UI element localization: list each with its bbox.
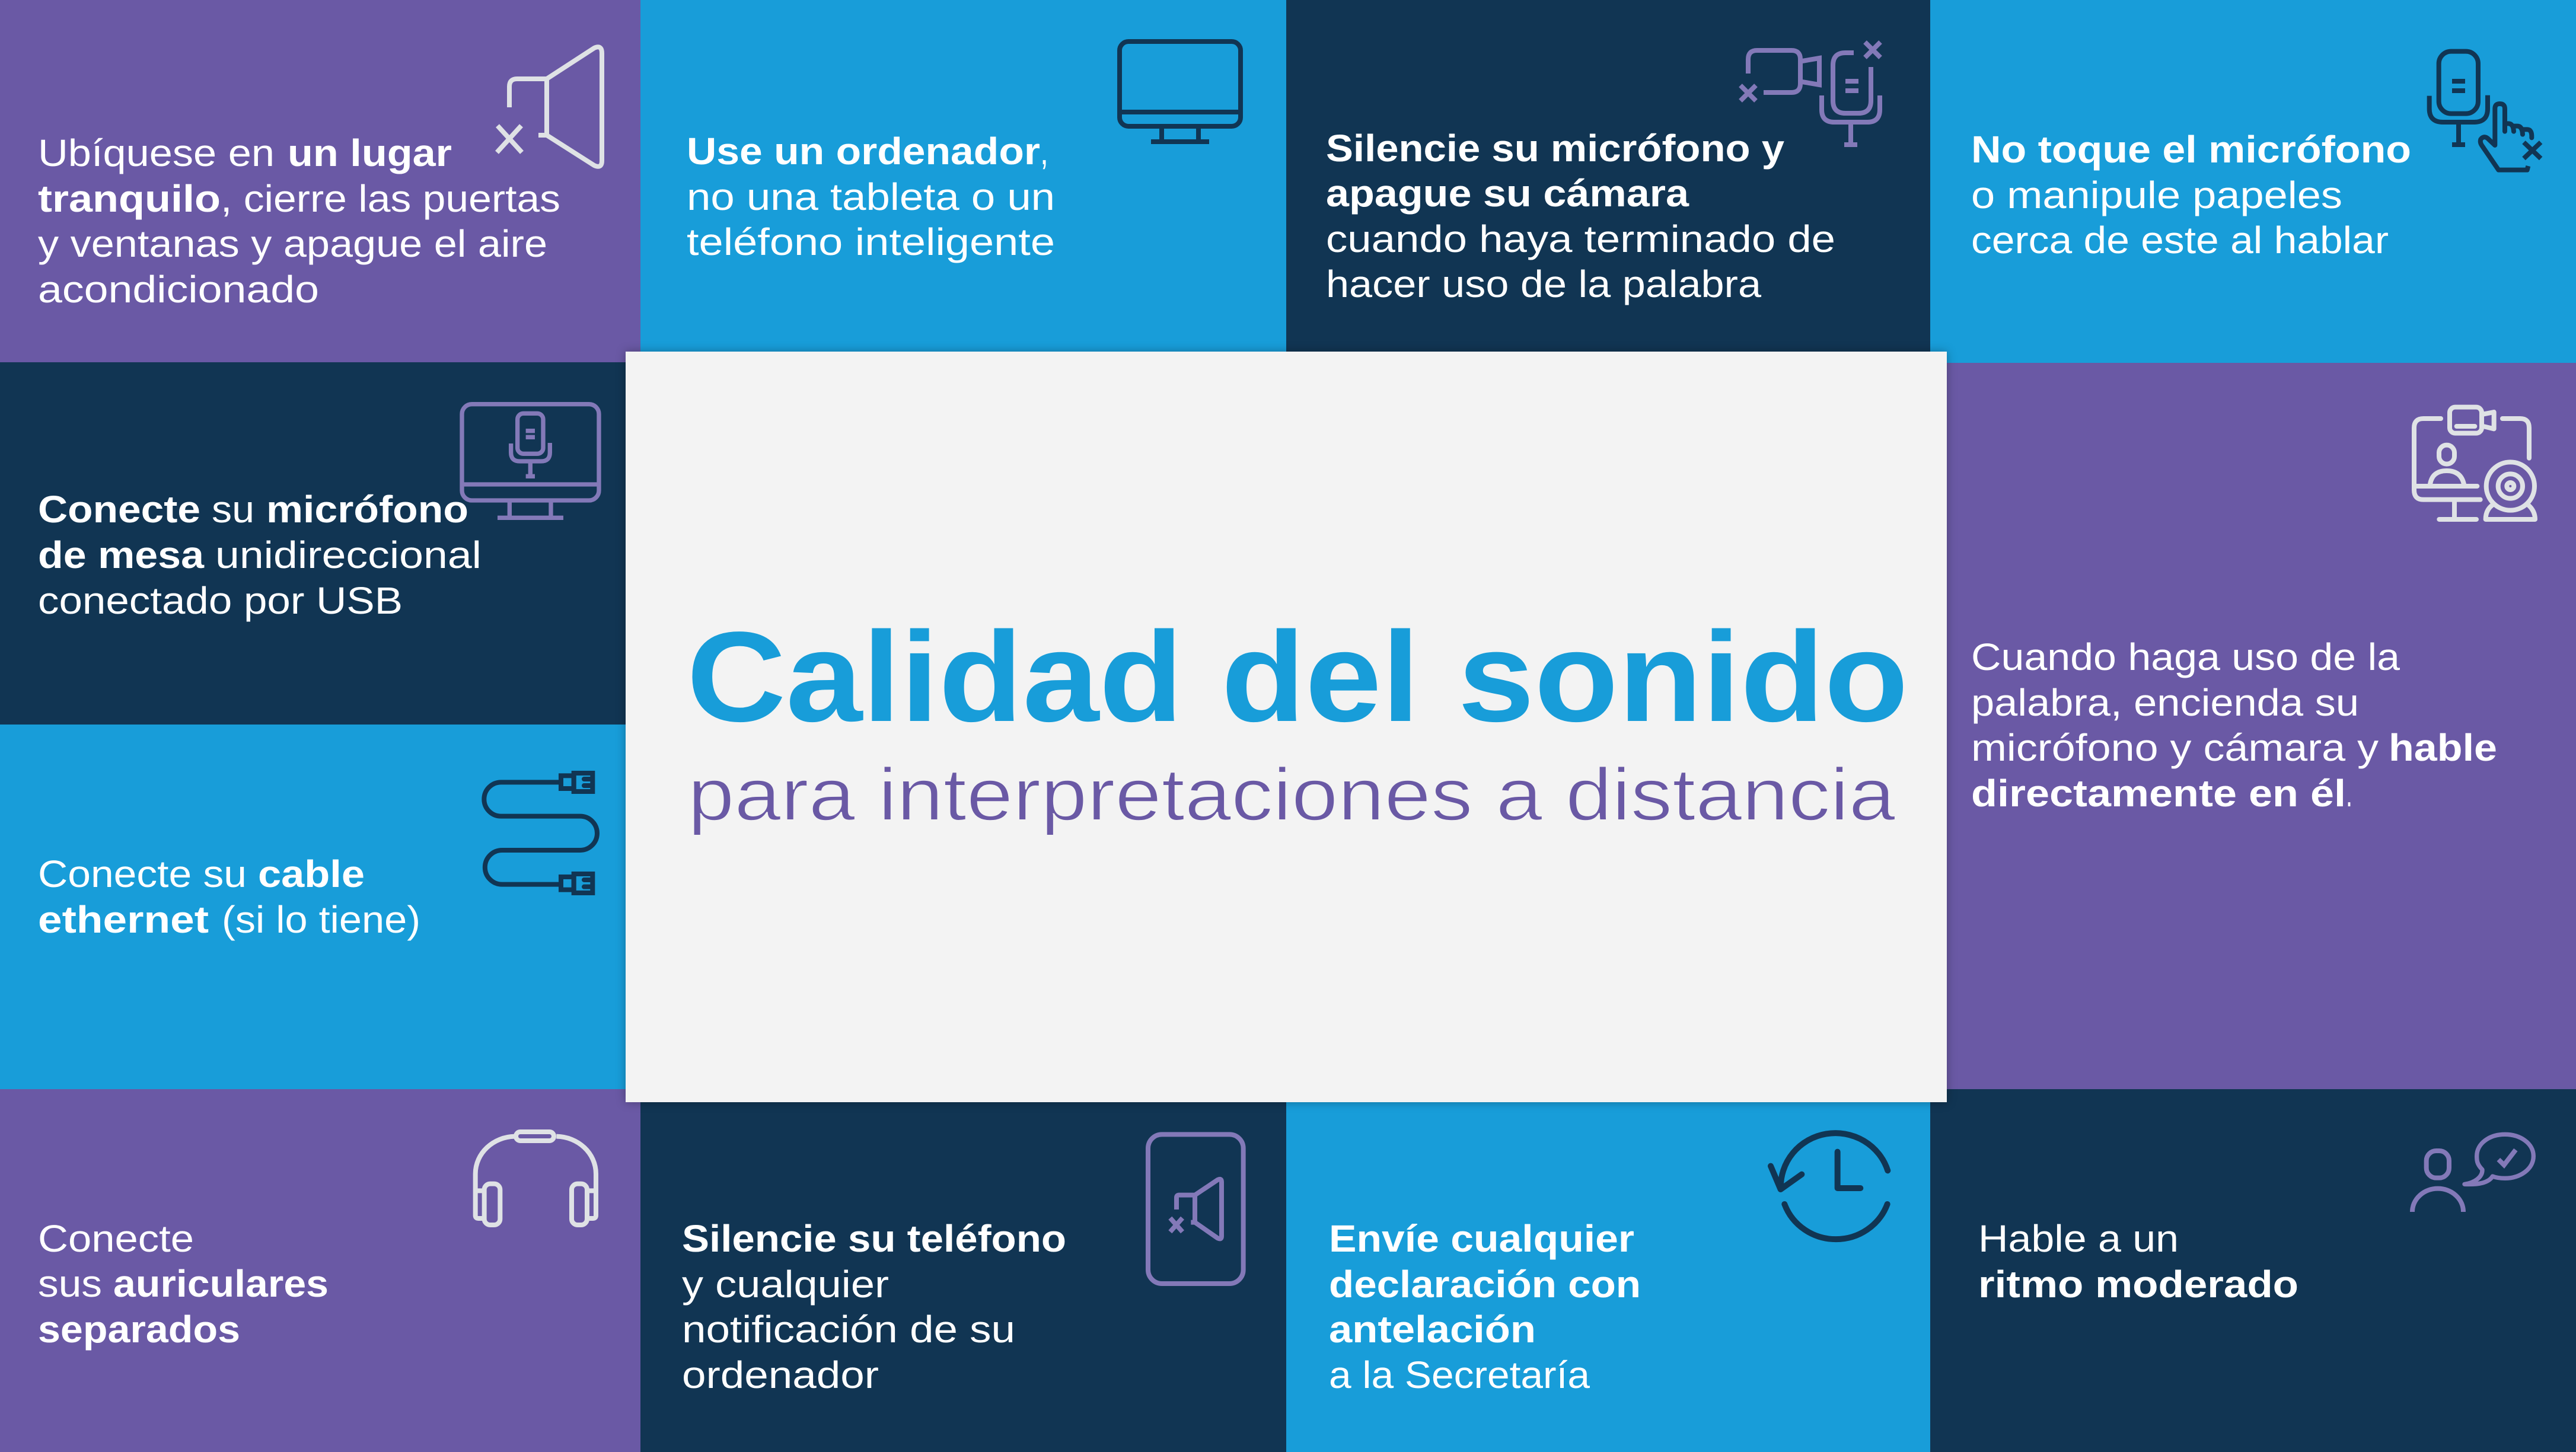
text: moderate pace: ritmo moderado	[1978, 1263, 2298, 1306]
text: speak directly: Cuando haga uso de la	[1971, 636, 2400, 678]
text: moderate pace	[1978, 1217, 2298, 1306]
text: use a computer: ,	[1040, 130, 1048, 173]
panel: mute when finished	[1286, 0, 1930, 362]
panel: do not touch microphone	[1930, 0, 2576, 363]
text: mute when finished: Silencie su micrófono y	[1326, 127, 1784, 170]
panel: moderate pace	[1930, 1089, 2576, 1452]
text: speak directly: .	[2346, 772, 2352, 815]
text: speak directly	[1971, 636, 2497, 815]
text: separate headphones: auriculares	[113, 1262, 329, 1305]
panel: separate headphones	[0, 1089, 640, 1452]
text: separate headphones	[38, 1217, 329, 1351]
text: mute when finished: cuando haya terminado de	[1326, 218, 1835, 260]
text: ethernet cable: cable	[258, 853, 365, 895]
text: desk microphone: unidireccional	[215, 534, 482, 576]
text: separate headphones: Conecte	[38, 1217, 194, 1260]
text: quiet place: tranquilo	[38, 177, 221, 220]
panel: use a computer	[640, 0, 1286, 362]
text: use a computer: teléfono inteligente	[687, 221, 1055, 263]
text: quiet place: un lugar	[288, 132, 452, 174]
text: speak directly: micrófono y cámara y	[1971, 726, 2379, 769]
text: use a computer	[687, 130, 1055, 263]
title: Calidad del sonido	[687, 605, 1908, 748]
text: do not touch microphone: No toque el micrófono	[1971, 128, 2411, 171]
text: send statement	[1329, 1217, 1641, 1396]
text: ethernet cable	[38, 853, 420, 941]
panel: ethernet cable	[0, 725, 640, 1089]
panel: send statement	[1286, 1089, 1930, 1452]
text: quiet place: acondicionado	[38, 268, 319, 311]
text: send statement: declaración con	[1329, 1263, 1641, 1306]
text: do not touch microphone	[1971, 128, 2411, 261]
text: send statement: antelación	[1329, 1308, 1536, 1351]
text: desk microphone: Conecte	[38, 488, 200, 531]
text: do not touch microphone: cerca de este al hablar	[1971, 219, 2389, 261]
text: silence phone: ordenador	[682, 1354, 879, 1396]
text: quiet place	[38, 132, 560, 311]
text: ethernet cable: (si lo tiene)	[222, 898, 420, 941]
panel: quiet place	[0, 0, 640, 362]
icon: cable	[484, 773, 597, 893]
text: silence phone: y cualquier	[682, 1263, 889, 1306]
text: ethernet cable: Conecte su	[38, 853, 247, 895]
text: quiet place: , cierre las puertas	[221, 177, 560, 220]
panel: speak directly	[1930, 363, 2576, 1089]
icon: muted speaker	[497, 47, 602, 167]
text: ethernet cable: ethernet	[38, 898, 209, 941]
icon: microphone and hand	[2430, 52, 2541, 170]
text: silence phone: notificación de su	[682, 1308, 1015, 1351]
text: quiet place: y ventanas y apague el aire	[38, 222, 547, 265]
text: quiet place: Ubíquese en	[38, 132, 275, 174]
text: silence phone	[682, 1217, 1066, 1396]
text: mute when finished	[1326, 127, 1835, 305]
text: send statement: a la Secretaría	[1329, 1354, 1590, 1396]
text: send statement: Envíe cualquier	[1329, 1217, 1634, 1260]
subtitle: para interpretaciones a distancia	[688, 754, 1896, 836]
text: separate headphones: sus	[38, 1262, 102, 1305]
text: use a computer: Use un ordenador	[687, 130, 1040, 173]
text: moderate pace: Hable a un	[1978, 1217, 2179, 1260]
panel: desk microphone	[0, 362, 640, 725]
text: desk microphone	[38, 488, 482, 622]
panel: central title card	[626, 352, 1947, 1102]
icon: headphones	[476, 1132, 596, 1225]
text: speak directly: directamente en él	[1971, 772, 2346, 815]
text: mute when finished: apague su cámara	[1326, 172, 1689, 215]
text: mute when finished: hacer uso de la palabra	[1326, 263, 1761, 305]
icon: monitor	[1120, 42, 1241, 142]
icon: clock with back arrow	[1771, 1133, 1888, 1239]
text: speak directly: palabra, encienda su	[1971, 681, 2359, 724]
text: use a computer: no una tableta o un	[687, 175, 1055, 218]
icon: monitor with microphone	[462, 404, 599, 518]
text: separate headphones: separados	[38, 1308, 240, 1351]
panel: silence phone	[640, 1089, 1286, 1452]
icon: speaker with speech bubble	[2412, 1134, 2533, 1212]
icon: phone with muted speaker	[1148, 1134, 1244, 1284]
text: desk microphone: su	[212, 488, 254, 531]
text: desk microphone: de mesa	[38, 534, 204, 576]
icon: video call with webcam	[2414, 407, 2535, 519]
text: do not touch microphone: o manipule papeles	[1971, 174, 2342, 216]
text: desk microphone: micrófono	[266, 488, 468, 531]
text: speak directly: hable	[2389, 726, 2497, 769]
text: desk microphone: conectado por USB	[38, 579, 403, 622]
icon: muted camera and microphone	[1740, 42, 1880, 145]
text: silence phone: Silencie su teléfono	[682, 1217, 1066, 1260]
